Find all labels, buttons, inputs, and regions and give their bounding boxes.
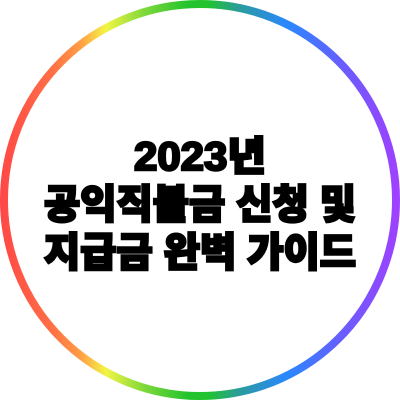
title	[44, 135, 356, 275]
title line 3: 지급금 완벽 가이드	[44, 231, 356, 275]
title line 2: 공익직불금 신청 및	[44, 183, 356, 227]
title line 1: 2023년	[134, 135, 266, 179]
